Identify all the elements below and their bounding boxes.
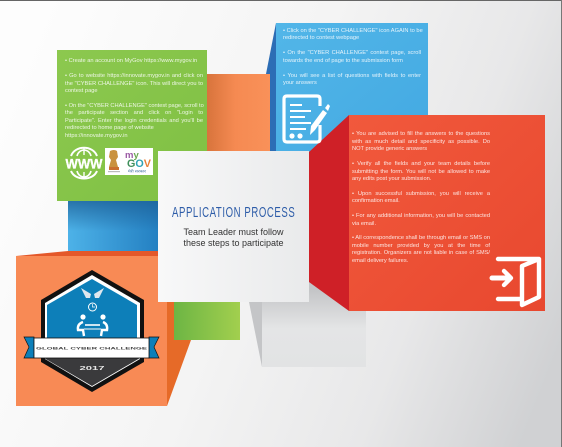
panel text: green steps: https://innovate.mygov.in (65, 133, 128, 139)
panel text: blue steps: towards the end of page to the submission form (283, 58, 403, 64)
ribbon tails (24, 337, 34, 358)
subtitle (183, 226, 284, 248)
panel text: blue steps: • Click on the "CYBER CHALLENGE" icon AGAIN to be (283, 28, 423, 34)
orange panel side (167, 255, 191, 406)
panel text: red guidance: • Upon successful submission, you will receive a (352, 191, 490, 197)
panel text: blue steps: your answers (283, 80, 317, 86)
panel text: green steps: the participate section and click on "Login to (65, 110, 203, 116)
logo: MyGov (105, 148, 153, 175)
icon: www globe: WWW (66, 156, 103, 172)
panel text: red guidance: • For any additional information, you will be contacted (352, 213, 490, 219)
clock (88, 303, 96, 311)
badge: Global Cyber Challenge 2017 (24, 270, 160, 392)
panel text: green steps: contest page (65, 88, 98, 94)
icon: www globe (65, 146, 103, 180)
badge: Global Cyber Challenge 2017: GLOBAL CYBER CHALLENGE (36, 346, 148, 350)
panel text: red guidance: mobile number provided by you at the time of (352, 243, 490, 249)
green panel (57, 50, 207, 201)
panel text: blue steps (283, 28, 423, 86)
orange back panel (207, 74, 270, 154)
orange band (16, 251, 190, 256)
gray lower block (262, 282, 366, 367)
subtitle: Team Leader must follow (183, 226, 284, 236)
logo: MyGov: GOV (127, 158, 152, 170)
panel text: red guidance: via email. (352, 221, 376, 227)
people at table (78, 314, 107, 336)
small green block (174, 302, 240, 340)
blue lower-left panel (68, 201, 158, 251)
panel text: red guidance: submitting the form. You will not be allowed to make (352, 168, 490, 174)
panel text: green steps: the "CYBER CHALLENGE" icon. This will direct you to (65, 81, 203, 87)
panel text: red guidance: • You are advised to fill the answers to the questions (352, 131, 490, 137)
panel text: red guidance: email delivery failures. (352, 258, 408, 264)
panel text: red guidance: with as much detail and specificity as possible. Do (352, 139, 490, 145)
panel text: red guidance (352, 131, 490, 264)
orange badge panel (16, 256, 167, 406)
panel text: green steps: • Create an account on MyGov https://www.mygov.in (65, 58, 197, 64)
subtitle: these steps to participate (183, 238, 284, 248)
panel text: red guidance: confirmation email. (352, 198, 400, 204)
panel text: blue steps: • You will see a list of questions with fields to enter (283, 73, 421, 79)
red panel (349, 115, 545, 311)
badge: Global Cyber Challenge 2017: 2017 (80, 366, 105, 372)
panel text: red guidance: registration. Organizers are not liable in case of SMS/ (352, 250, 490, 256)
logo: MyGov: my (125, 150, 139, 161)
blue panel (276, 23, 428, 153)
gray lower block shadow side (249, 302, 262, 367)
icon: exit door (490, 256, 542, 308)
blue panel side (266, 23, 276, 152)
panel text: green steps: redirected to home page of website (65, 125, 154, 131)
title: APPLICATION PROCESS (172, 204, 295, 221)
panel text: green steps (65, 58, 204, 139)
panel text: red guidance: any edits post your submission. (352, 176, 431, 182)
panel text: green steps: • Go to website https://innovate.mygov.in and click on (65, 73, 203, 79)
red panel side (309, 115, 349, 311)
panel text: green steps: • On the "CYBER CHALLENGE" contest page, scroll to (65, 103, 204, 109)
panel text: green steps: Participate". Enter the login credentials and you'll be (65, 118, 203, 124)
panel text: red guidance: • Verify all the fields and your team details before (352, 161, 490, 167)
panel text: blue steps: • On the "CYBER CHALLENGE" contest page, scroll (283, 50, 421, 56)
panel text: red guidance: NOT provide generic answers (352, 146, 427, 152)
wings (81, 288, 104, 298)
icon: form and pen (282, 94, 330, 144)
center panel (158, 151, 309, 302)
panel text: blue steps: redirected to contest webpage (283, 35, 359, 41)
logo: MyGov: मेरी सरकार (128, 168, 147, 174)
ribbon (34, 338, 149, 358)
panel text: red guidance: • All correspondence shall be through email or SMS on (352, 235, 490, 241)
